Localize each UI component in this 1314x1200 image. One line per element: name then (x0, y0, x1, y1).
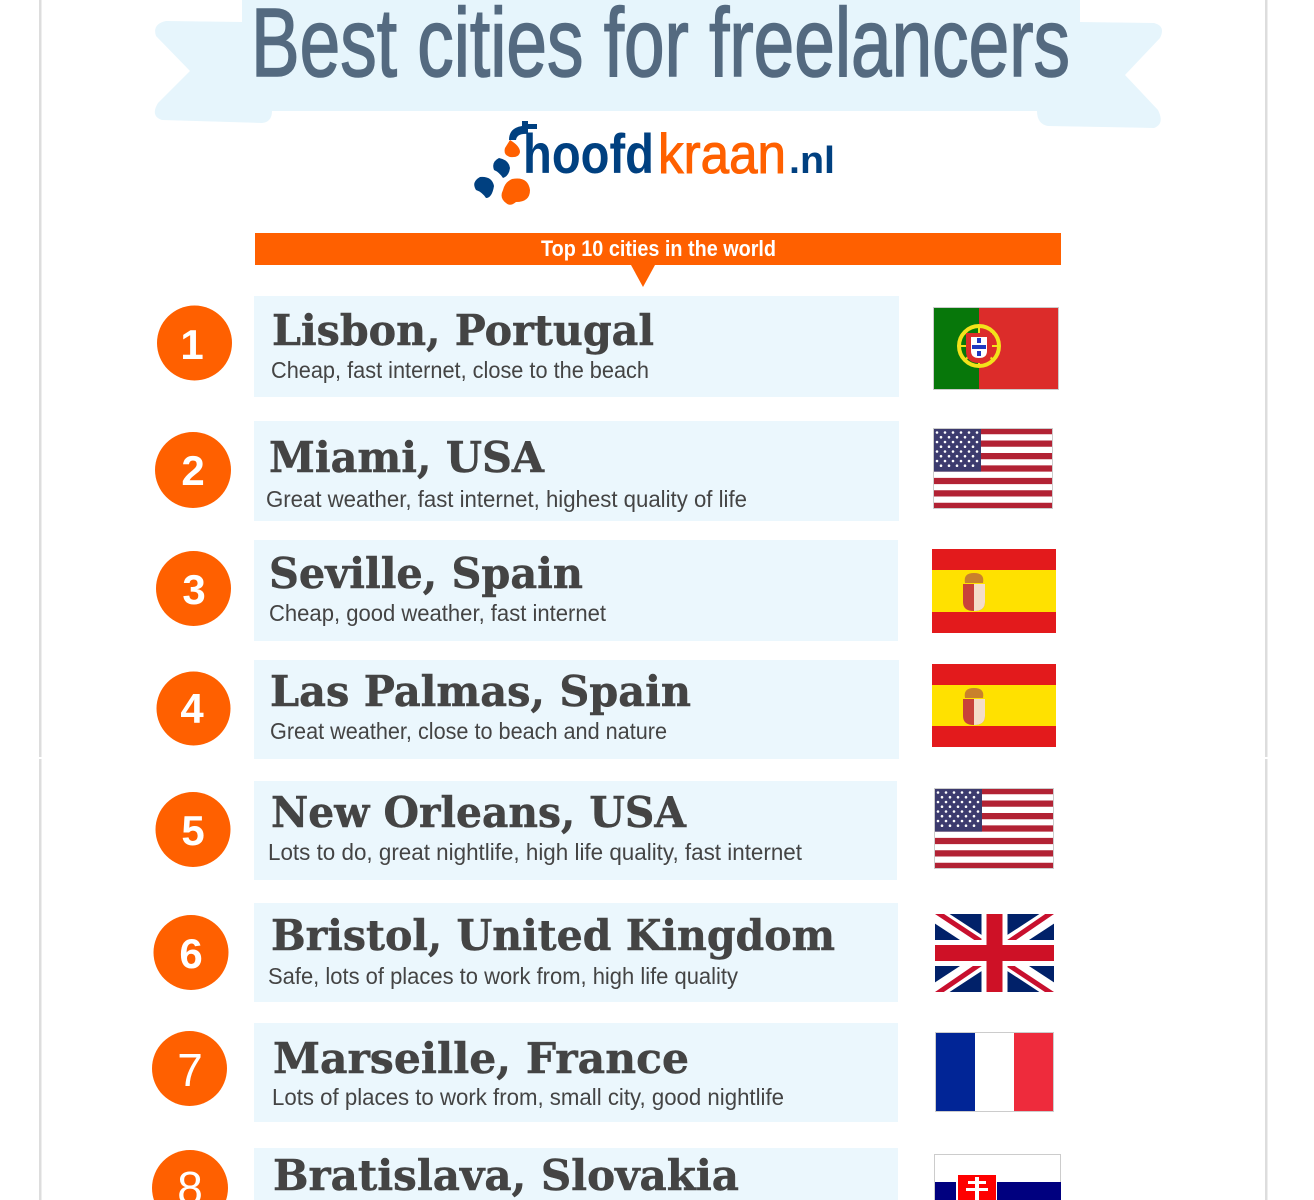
rank 4: Las Palmas (156, 660, 899, 759)
rank 1: Lisbon (157, 296, 899, 397)
rank 8: Bratislava (152, 1148, 898, 1200)
rank 1: Lisbon: Lisbon, Portugal (272, 306, 654, 355)
title ribbon (155, 0, 1162, 128)
rank 5: New Orleans (156, 781, 897, 880)
logo: hoofdkraan.nl: hoofd (523, 122, 654, 185)
rank 2: Miami: Great weather, fast internet, highest quality of life (266, 486, 747, 512)
flag: Spain (932, 664, 1056, 747)
rank 6: Bristol: 6 (179, 930, 203, 977)
rank 3: Seville: Seville, Spain (269, 549, 583, 598)
flag: USA (934, 788, 1054, 869)
rank 7: Marseille: 7 (177, 1044, 203, 1096)
icon: tap and heads (474, 121, 537, 205)
logo: hoofdkraan.nl: kraan (658, 122, 786, 185)
rank 6: Bristol (154, 903, 898, 1002)
banner: top 10 cities: Top 10 cities in the world (541, 236, 776, 261)
rank 7: Marseille: Lots of places to work from, small city, good nightlife (272, 1084, 784, 1110)
flag: Spain (932, 549, 1056, 633)
rank 2: Miami (155, 421, 899, 521)
rank 1: Lisbon: 1 (180, 321, 204, 368)
rank 4: Las Palmas: 4 (180, 685, 204, 732)
rank 5: New Orleans: 5 (181, 807, 205, 854)
flag: France (935, 1032, 1054, 1112)
rank 4: Las Palmas: Great weather, close to beach and nature (270, 718, 667, 744)
rank 2: Miami: Miami, USA (269, 433, 545, 482)
banner: top 10 cities (255, 233, 1061, 287)
rank 3: Seville: 3 (182, 566, 206, 613)
rank 4: Las Palmas: Las Palmas, Spain (270, 667, 691, 716)
rank 5: New Orleans: Lots to do, great nightlife, high life quality, fast internet (268, 839, 803, 865)
flag: Slovakia (934, 1154, 1061, 1200)
flag: Portugal (933, 307, 1059, 390)
logo: hoofdkraan.nl: .nl (789, 140, 835, 182)
rank 7: Marseille (152, 1023, 898, 1122)
rank 5: New Orleans: New Orleans, USA (271, 788, 687, 837)
rank 3: Seville (156, 540, 898, 641)
logo: hoofdkraan.nl (474, 121, 835, 205)
flag: United Kingdom (935, 914, 1054, 992)
rank 2: Miami: 2 (181, 447, 205, 494)
rank 7: Marseille: Marseille, France (273, 1034, 689, 1083)
rank 8: Bratislava: Bratislava, Slovakia (273, 1151, 739, 1200)
rank 3: Seville: Cheap, good weather, fast internet (269, 600, 607, 626)
flag: USA (933, 428, 1053, 509)
rank 1: Lisbon: Cheap, fast internet, close to the beach (271, 357, 649, 383)
rank 6: Bristol: Bristol, United Kingdom (271, 911, 835, 960)
rank 6: Bristol: Safe, lots of places to work from, high life quality (268, 963, 738, 989)
